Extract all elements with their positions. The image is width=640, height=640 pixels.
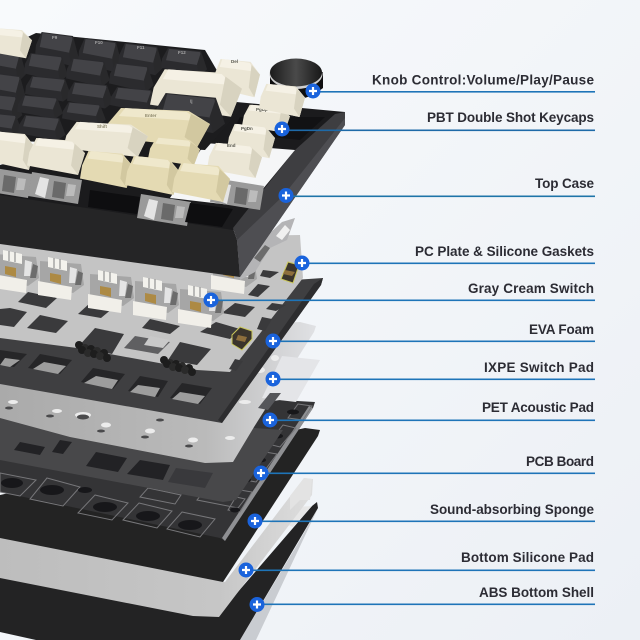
callout: PCB Board: PCB Board [526, 454, 594, 469]
switches row [0, 250, 257, 328]
key legends [52, 35, 284, 148]
key legends: End [227, 143, 236, 148]
callout: EVA Foam [266, 322, 595, 348]
key legends: F11 [137, 45, 145, 50]
callout: Top Case [278, 176, 595, 203]
callout: IXPE Switch Pad [266, 360, 595, 386]
callout: Sound-absorbing Sponge [248, 502, 595, 528]
key legends: Home [271, 86, 284, 91]
callout: Knob Control [306, 72, 595, 98]
callout: IXPE Switch Pad: IXPE Switch Pad [484, 360, 594, 375]
Home key over knob [259, 84, 305, 117]
key legends: Shift [97, 124, 107, 129]
callout: Sound-absorbing Sponge: Sound-absorbing Sponge [430, 502, 594, 517]
switches under top keys [0, 166, 264, 227]
layer: EVA foam [0, 278, 323, 423]
layer: sound-absorbing sponge [0, 428, 320, 582]
translucent switch edge [238, 218, 295, 280]
callout: PET Acoustic Pad [262, 400, 595, 428]
callout: Gray Cream Switch [204, 281, 595, 308]
key legends: Del [231, 59, 238, 64]
key legends: Enter [145, 113, 157, 118]
callout: Bottom Silicone Pad: Bottom Silicone Pad [461, 550, 594, 565]
key legends: PgUp [256, 107, 268, 112]
tan keycaps [80, 138, 230, 202]
layer: PC plate [0, 235, 303, 376]
key legends: F12 [178, 50, 186, 55]
key legends: \| [190, 99, 193, 104]
callout: ABS Bottom Shell: ABS Bottom Shell [479, 585, 594, 600]
callout: PBT Double Shot Keycaps [274, 110, 595, 136]
layer: IXPE switch pad [0, 322, 320, 463]
black gasket clusters [75, 341, 196, 376]
callout: PC Plate and Silicone Gaskets: PC Plate & Silicone Gaskets [415, 244, 594, 259]
callout lines and labels [204, 72, 595, 612]
callout: PET Acoustic Pad: PET Acoustic Pad [482, 400, 594, 415]
key legends: F9 [52, 35, 58, 40]
callout: Knob Control: Knob Control:Volume/Play/Pause [372, 72, 594, 88]
layer: ABS bottom shell [0, 502, 318, 640]
callout: EVA Foam: EVA Foam [529, 322, 594, 337]
keycaps [0, 28, 305, 202]
cream keycaps [0, 28, 305, 178]
dark key bed [0, 33, 240, 150]
layer: PET acoustic pad [0, 410, 283, 502]
layer: top case [0, 100, 345, 277]
callout: Gray Cream Switch: Gray Cream Switch [468, 281, 594, 296]
callout: Top Case: Top Case [535, 176, 594, 191]
key legends: PgDn [241, 126, 253, 131]
icon: volume knob [270, 58, 323, 99]
key legends: F10 [95, 40, 103, 45]
icon: yellow gaskets [232, 262, 299, 350]
dark keycaps [0, 32, 207, 140]
layer: bottom silicone pad [0, 478, 313, 617]
layer: PCB board [0, 400, 315, 541]
callout: PC Plate and Silicone Gaskets [294, 244, 595, 270]
callout: ABS Bottom Shell [250, 585, 595, 612]
callout: Bottom Silicone Pad [238, 550, 595, 578]
callout: PCB Board [254, 454, 595, 480]
callout: PBT Double Shot Keycaps: PBT Double Shot Keycaps [427, 110, 594, 125]
